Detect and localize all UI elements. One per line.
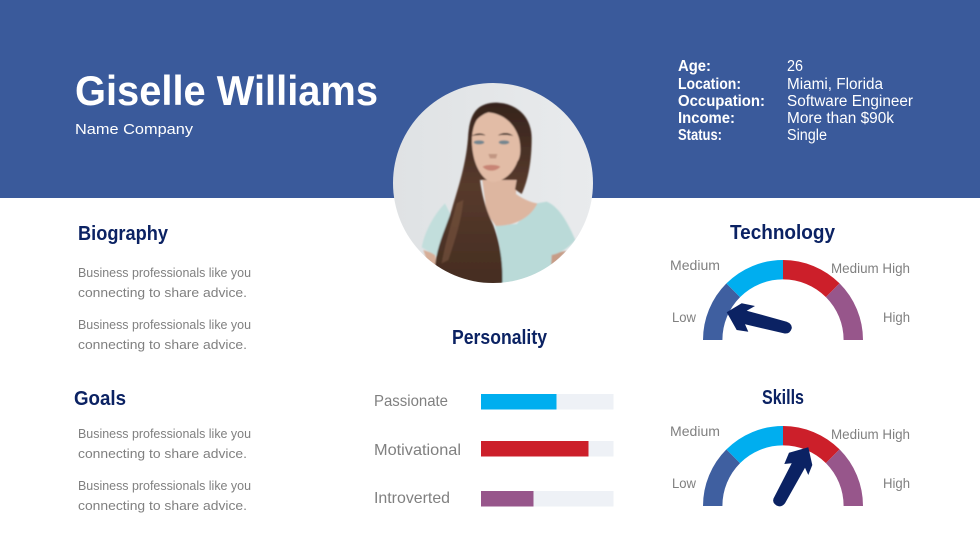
subtitle: Name Company <box>75 121 194 138</box>
gauge: skills: Low <box>672 476 696 491</box>
profile details: 26 <box>787 58 803 75</box>
biography text: connecting to share advice. <box>78 285 247 300</box>
header band <box>0 0 980 198</box>
profile details: Miami, Florida <box>787 76 883 93</box>
goals text: connecting to share advice. <box>78 498 247 513</box>
profile details: Age: <box>678 58 711 75</box>
bar chart: personality: Introverted <box>374 490 450 507</box>
heading: goals: Goals <box>74 388 126 410</box>
profile details <box>678 58 913 144</box>
biography text: Business professionals like you <box>78 265 251 280</box>
gauge: skills <box>670 424 910 506</box>
arrow: skills pointer <box>773 447 812 506</box>
bar chart: personality: Motivational <box>374 442 461 459</box>
profile details: More than $90k <box>787 110 894 127</box>
goals text: connecting to share advice. <box>78 446 247 461</box>
goals text: Business professionals like you <box>78 478 251 493</box>
heading: biography: Biography <box>78 223 169 245</box>
profile details: Location: <box>678 76 741 93</box>
gauge: skills: Medium <box>670 424 720 439</box>
biography text: Business professionals like you <box>78 317 251 332</box>
gauge: technology: Medium High <box>831 261 910 276</box>
title: Giselle Williams <box>75 67 378 114</box>
bar chart: personality: Passionate <box>374 393 448 410</box>
arrow: technology pointer <box>727 303 792 334</box>
goals text: Business professionals like you <box>78 426 251 441</box>
biography text: connecting to share advice. <box>78 337 247 352</box>
bar chart: personality <box>374 393 614 507</box>
gauge: technology: Medium <box>670 258 720 273</box>
portrait photo <box>390 80 597 287</box>
gauge: technology: High <box>883 310 910 325</box>
biography text <box>78 265 251 352</box>
heading: skills: Skills <box>762 387 804 409</box>
profile details: Software Engineer <box>787 93 913 110</box>
profile details: Status: <box>678 127 722 144</box>
profile details: Single <box>787 127 827 144</box>
gauge: skills: High <box>883 476 910 491</box>
goals text <box>78 426 251 513</box>
profile details: Occupation: <box>678 93 765 110</box>
heading: technology: Technology <box>730 222 836 244</box>
heading: personality: Personality <box>452 327 548 349</box>
profile details: Income: <box>678 110 735 127</box>
gauge: technology <box>670 258 910 340</box>
gauge: technology: Low <box>672 310 696 325</box>
gauge: skills: Medium High <box>831 427 910 442</box>
